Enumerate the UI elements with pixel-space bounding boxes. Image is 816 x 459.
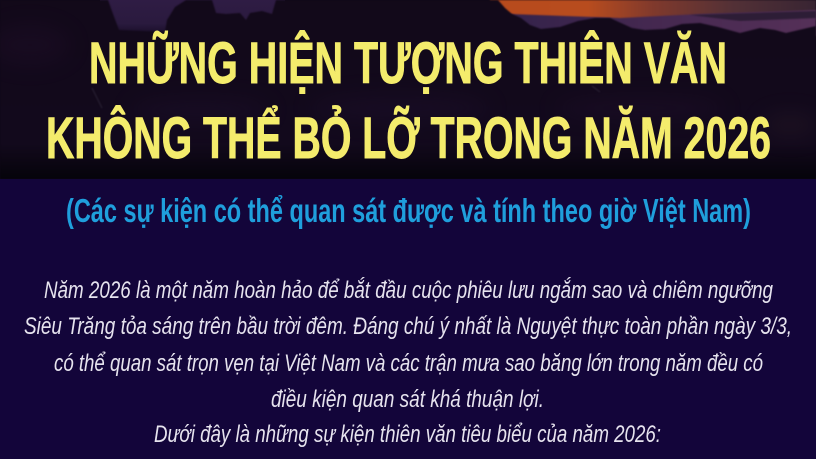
panel: header photo of mountains at dusk	[0, 0, 816, 179]
intro line 5: Dưới đây là những sự kiện thiên văn tiêu biểu của năm 2026:	[154, 421, 661, 448]
mountains: silhouette	[0, 0, 816, 179]
panel: dark navy body background	[0, 179, 816, 459]
mountains: pale rock streaks	[92, 86, 600, 108]
intro line 4: điều kiện quan sát khá thuận lợi.	[271, 386, 544, 413]
sky: purple gap	[100, 0, 285, 36]
title	[46, 31, 771, 171]
sky: dark cloud band	[690, 11, 816, 21]
sky: orange sunset	[490, 0, 816, 20]
intro text block	[24, 277, 792, 448]
mountains: dim foliage texture	[0, 25, 816, 137]
sky: purple horizon haze	[500, 10, 816, 36]
